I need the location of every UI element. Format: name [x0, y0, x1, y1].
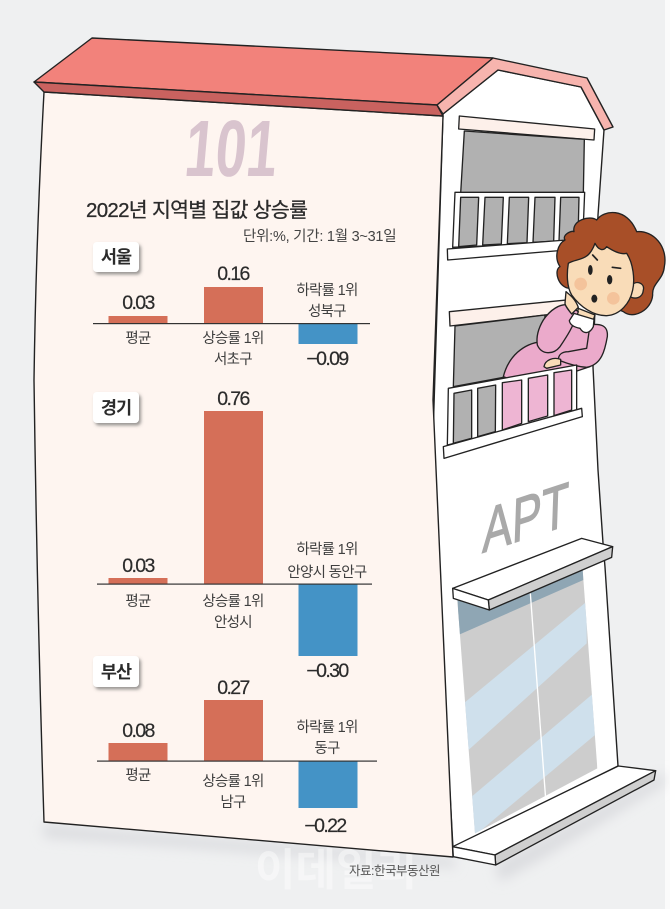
bars: Seoul	[93, 287, 370, 344]
upper windows and woman	[443, 116, 665, 458]
labels: Busan	[122, 677, 358, 837]
roof: eave	[34, 82, 443, 116]
APT sign: APT	[482, 468, 570, 567]
ground shadow	[42, 772, 664, 882]
balcony lower	[443, 365, 582, 458]
ear	[630, 283, 644, 298]
labels: Busan: 상승률 1위	[202, 773, 264, 790]
hand on rail	[544, 358, 561, 368]
tag: Busan: 부산	[101, 662, 132, 682]
window glass lower	[453, 315, 545, 387]
tag: Gyeonggi	[93, 392, 139, 423]
hand on cheek	[565, 292, 578, 314]
torso	[503, 317, 593, 387]
labels: Busan: 0.08	[122, 720, 155, 742]
source: 자료:한국부동산원	[349, 864, 440, 878]
roof	[34, 38, 613, 130]
tag: Seoul: 서울	[101, 247, 132, 267]
labels: Gyeonggi: 평균	[125, 593, 151, 610]
building: front wall	[34, 92, 453, 857]
labels: Gyeonggi: −0.30	[306, 660, 349, 682]
roof: gable trim	[437, 58, 613, 130]
building: side wall	[432, 70, 618, 848]
bars: Gyeonggi	[97, 411, 372, 656]
tag: Gyeonggi: 경기	[101, 398, 131, 418]
labels: Busan: 남구	[220, 794, 246, 811]
labels: Gyeonggi: 안성시	[214, 614, 252, 631]
hair	[557, 213, 665, 315]
face details	[574, 255, 621, 305]
labels: Gyeonggi: 0.03	[122, 555, 155, 577]
collar	[569, 313, 594, 333]
labels: Seoul	[122, 263, 358, 370]
window lintel top	[459, 116, 595, 140]
roof: top surface	[34, 38, 493, 105]
labels: Seoul: −0.09	[306, 348, 348, 370]
watermark: 이데일리	[255, 846, 417, 895]
sleeve right	[558, 324, 607, 367]
labels: Seoul: 하락률 1위	[296, 282, 358, 299]
window lintel lower	[449, 299, 573, 326]
lower window	[450, 538, 656, 865]
labels: Seoul: 서초구	[214, 351, 252, 368]
panel: Gyeonggi	[93, 388, 372, 682]
panel: Busan	[93, 656, 377, 837]
neck	[577, 308, 595, 322]
labels: Seoul: 성북구	[308, 303, 346, 320]
labels: Busan: −0.22	[304, 815, 346, 837]
unit note: 단위:%, 기간: 1월 3~31일	[243, 228, 396, 245]
panel: Seoul	[93, 242, 370, 370]
labels: Seoul: 0.03	[122, 292, 155, 314]
tag: Seoul	[93, 242, 139, 272]
labels: Busan: 동구	[314, 741, 340, 757]
labels: Gyeonggi	[122, 388, 367, 682]
labels: Busan: 평균	[125, 767, 151, 784]
bars: Busan	[97, 700, 377, 808]
shelf over door	[453, 538, 613, 610]
labels: Gyeonggi: 상승률 1위	[202, 593, 264, 610]
building number 101: 101	[182, 103, 281, 193]
title: 2022년 지역별 집값 상승률	[86, 199, 307, 222]
woman	[503, 213, 665, 387]
labels: Busan: 0.27	[217, 677, 250, 699]
labels: Seoul: 상승률 1위	[202, 330, 264, 347]
window glass top	[461, 131, 584, 193]
glass door	[458, 570, 598, 834]
labels: Seoul: 0.16	[217, 263, 250, 285]
face	[567, 243, 634, 316]
labels: Gyeonggi: 하락률 1위	[296, 541, 358, 558]
sleeve left	[537, 305, 578, 353]
tag: Busan	[93, 656, 139, 687]
balcony top	[447, 192, 585, 260]
labels: Gyeonggi: 0.76	[217, 388, 250, 410]
labels: Seoul: 평균	[125, 330, 151, 347]
labels: Busan: 하락률 1위	[296, 719, 358, 736]
labels: Gyeonggi: 안양시 동안구	[287, 564, 367, 581]
door sill	[453, 766, 656, 865]
